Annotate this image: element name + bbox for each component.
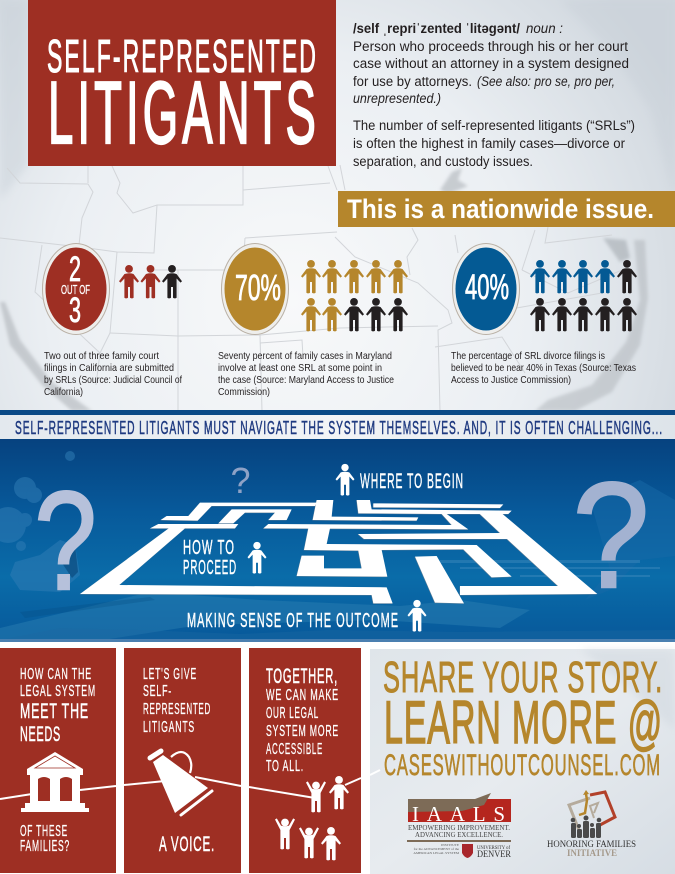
logo: Honoring Families Initiative: HONORING FAMILIES	[547, 839, 636, 849]
panel: give a voice: LET'S GIVE	[143, 666, 197, 683]
brush texture	[0, 451, 675, 642]
icon: question mark right: ?	[573, 452, 649, 619]
panel: maze	[0, 439, 675, 642]
icon: question mark left: ?	[34, 462, 97, 619]
panel: give a voice: LITIGANTS	[143, 719, 195, 736]
logo: Honoring Families Initiative: INITIATIVE	[567, 848, 617, 858]
stat: 40 percent: Access to Justice Commission)	[451, 374, 571, 386]
panel: maze: WHERE TO BEGIN	[360, 470, 464, 493]
icon: megaphone	[150, 751, 212, 815]
label: how to proceed	[183, 537, 266, 579]
logo: IAALS: DENVER	[477, 849, 511, 859]
icon: courthouse	[21, 752, 89, 812]
stat: 2 out of 3	[42, 244, 182, 398]
label: making sense of the outcome	[187, 600, 426, 632]
definition text block: The number of self-represented litigants (“SRLs”)	[353, 118, 635, 133]
panel: title	[28, 0, 336, 166]
stat: 2 out of 3: by SRLs (Source: Judicial Council of	[44, 374, 182, 386]
stat: 70 percent: Commission)	[218, 386, 270, 398]
definition text block: is often the highest in family cases—divorce or	[353, 136, 625, 151]
panel: give a voice: REPRESENTED	[143, 701, 211, 718]
definition text block: separation, and custody issues.	[353, 154, 533, 169]
panel: together: OUR LEGAL	[266, 705, 319, 722]
panel: give a voice: SELF-	[143, 683, 172, 700]
stat: 40 percent: 40%	[465, 268, 509, 307]
icon: group of people	[275, 776, 349, 860]
panel: together: ACCESSIBLE	[266, 741, 323, 758]
stat: 2 out of 3: 3	[69, 291, 81, 330]
logo: IAALS: UNIVERSITY of	[477, 844, 510, 851]
maze walls	[80, 500, 597, 603]
definition text block: for use by attorneys.	[353, 74, 472, 89]
logo: IAALS: ADVANCING EXCELLENCE.	[415, 830, 503, 839]
logo: IAALS: INSTITUTE	[441, 843, 459, 847]
definition text block: Person who proceeds through his or her court	[353, 39, 628, 54]
panel: meet the needs: NEEDS	[20, 723, 61, 746]
stat: 2 out of 3: California)	[44, 386, 83, 398]
panel: meet the needs: HOW CAN THE	[20, 666, 92, 683]
panel: meet the needs: OF THESE	[20, 823, 68, 840]
label: where to begin	[336, 464, 464, 496]
panel: together: TOGETHER,	[266, 665, 338, 688]
heading: litigants: LITIGANTS	[48, 63, 320, 162]
panel: together	[249, 648, 361, 873]
page background with map	[0, 0, 675, 412]
definition text block: /self ˌrepriˈzented ˈlitəgənt/	[353, 21, 520, 36]
stat: 2 out of 3: OUT OF	[61, 282, 90, 297]
panel: meet the needs: LEGAL SYSTEM	[20, 683, 96, 700]
panel: together: TO ALL.	[266, 758, 304, 775]
panel: give a voice: A VOICE.	[159, 833, 215, 856]
heading: self-represented: SELF-REPRESENTED	[47, 30, 318, 82]
stat: 40 percent: The percentage of SRL divorce filings is	[451, 350, 605, 362]
panel: meet the needs	[0, 648, 116, 873]
stat: 70 percent: 70%	[235, 267, 281, 308]
stat: 2 out of 3: 2	[69, 250, 81, 289]
stat: 70 percent: involve at least one SRL at some point in	[218, 362, 382, 374]
definition text block: noun :	[526, 21, 563, 36]
logo: Honoring Families Initiative	[547, 790, 636, 858]
label: making sense of the outcome: MAKING SENSE OF THE OUTCOME	[187, 610, 399, 632]
label: how to proceed: HOW TO	[183, 537, 235, 559]
stat: 70 percent: Seventy percent of family cases in Maryland	[218, 350, 392, 362]
stat: 40 percent: believed to be near 40% in Texas (Source: Texas	[451, 362, 636, 374]
logo: IAALS: IAALS	[412, 802, 505, 826]
label: how to proceed: PROCEED	[183, 557, 237, 579]
strip: navigate the system	[0, 410, 675, 439]
panel: give a voice	[124, 648, 241, 873]
definition text block	[353, 21, 635, 169]
logo: IAALS: for the ADVANCEMENT of the	[414, 847, 459, 851]
logo: IAALS	[407, 793, 511, 859]
panel: together: SYSTEM MORE	[266, 723, 339, 740]
logo: IAALS: AMERICAN LEGAL SYSTEM	[413, 851, 460, 855]
panel: meet the needs: MEET THE	[20, 700, 89, 723]
stat: 70 percent	[218, 244, 408, 398]
definition text block: (See also: pro se, pro per,	[477, 74, 615, 89]
stat: 70 percent: the case (Source: Maryland Access to Justice	[218, 374, 394, 386]
definition text block: case without an attorney in a system designed	[353, 56, 629, 71]
stat: 2 out of 3: Two out of three family court	[44, 350, 159, 362]
definition text block: unrepresented.)	[353, 91, 441, 106]
logo: IAALS: EMPOWERING IMPROVEMENT.	[408, 823, 510, 832]
stat: 2 out of 3: filings in California are submitted	[44, 362, 174, 374]
panel: share your story	[370, 649, 675, 874]
panel: meet the needs: FAMILIES?	[20, 838, 70, 855]
icon: question mark small: ?	[230, 460, 251, 501]
panel: together: WE CAN MAKE	[266, 687, 339, 704]
stat: 40 percent	[451, 244, 637, 386]
